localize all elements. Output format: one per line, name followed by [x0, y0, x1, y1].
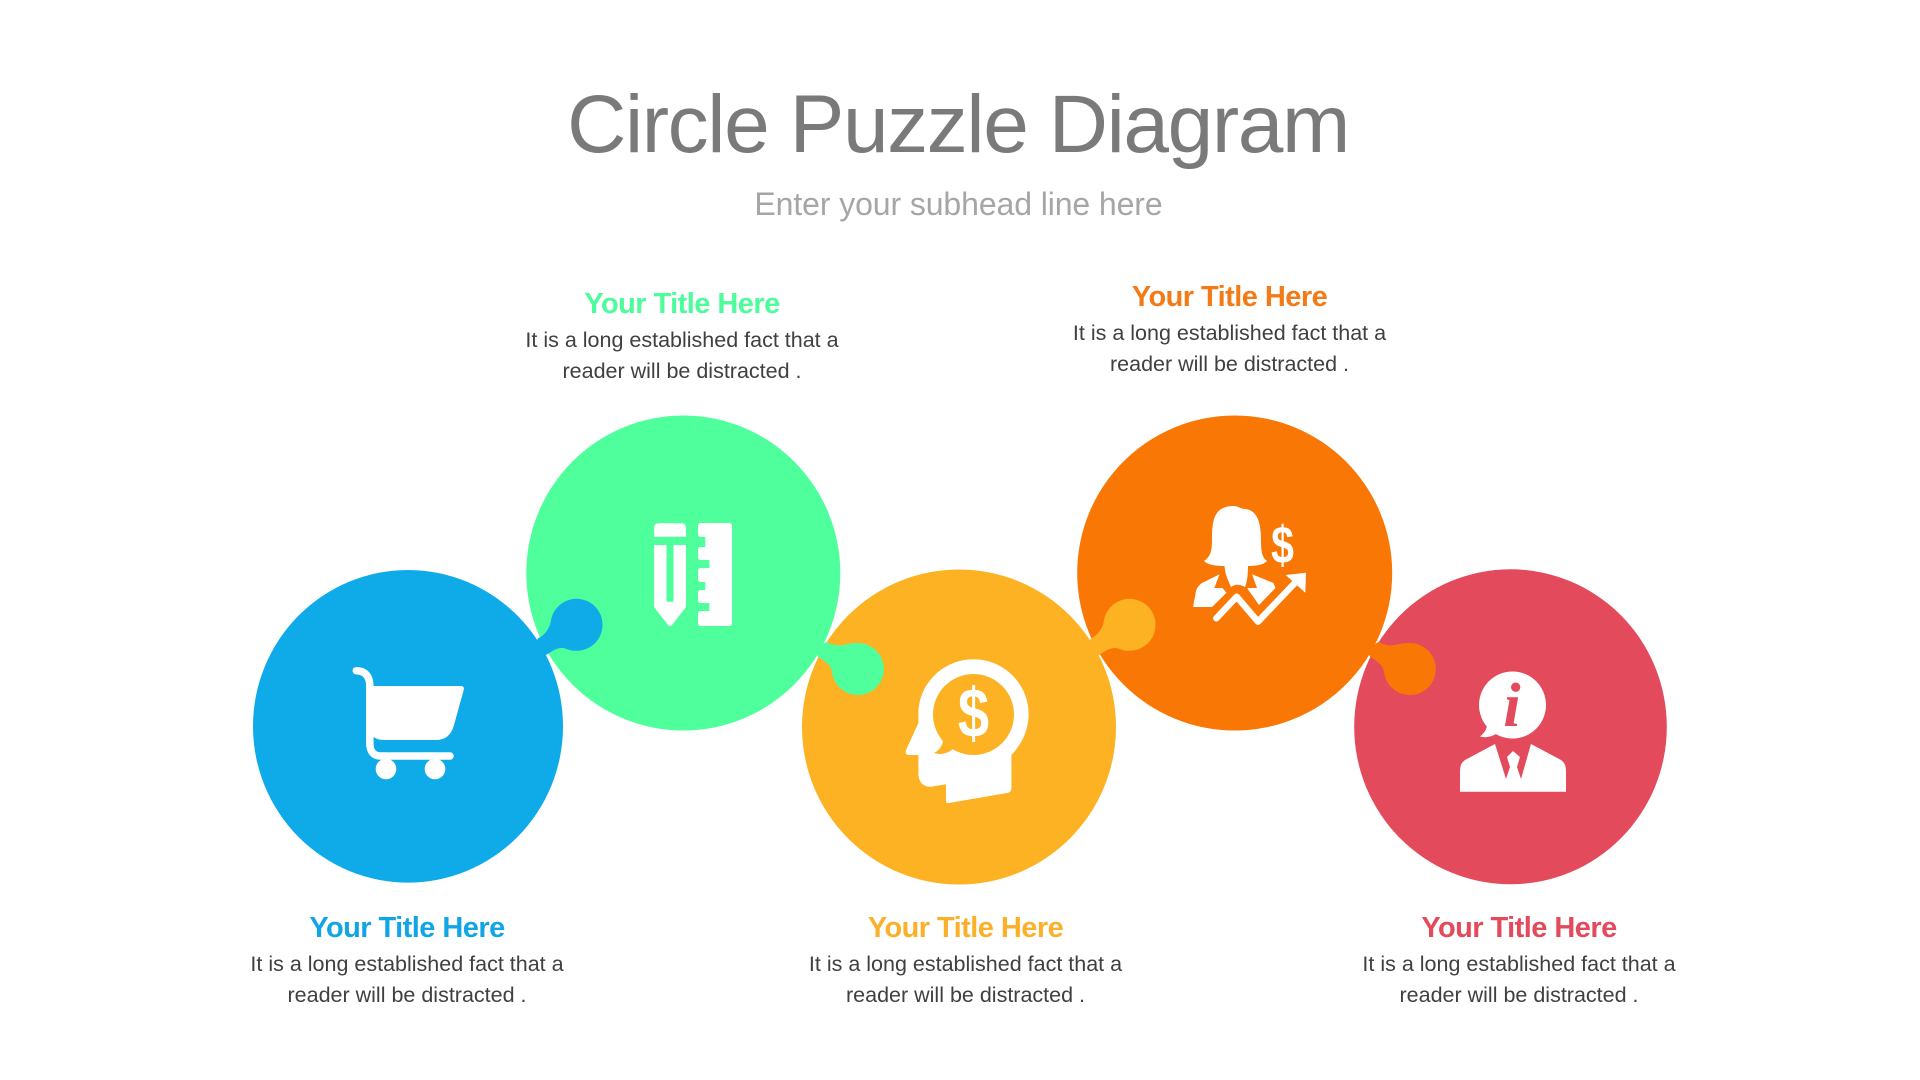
step 5: red circle with person info icon — [1354, 569, 1667, 884]
red circle — [1354, 569, 1667, 884]
caption: red step: It is a long established fact that a — [1362, 952, 1676, 976]
caption: orange step — [1073, 281, 1386, 376]
yellow circle — [802, 570, 1116, 884]
caption: blue step: Your Title Here — [309, 912, 505, 944]
title: Circle Puzzle Diagram — [567, 79, 1349, 170]
puzzle knob: blue into green — [532, 599, 603, 655]
caption: red step: reader will be distracted . — [1400, 983, 1638, 1007]
icon: shopping cart — [356, 671, 464, 779]
puzzle knob: yellow into orange — [1085, 599, 1156, 655]
step 4: orange circle with businesswoman icon — [1077, 416, 1436, 730]
caption: green step: reader will be distracted . — [562, 359, 802, 383]
caption: green step — [525, 288, 839, 383]
caption: yellow step: reader will be distracted . — [846, 983, 1085, 1007]
blue circle — [253, 570, 563, 883]
icon: businesswoman with rising chart: $ — [1271, 515, 1294, 574]
icon: pencil and ruler — [654, 523, 732, 626]
step 3: yellow circle with head and dollar icon — [802, 570, 1156, 884]
caption: red step — [1362, 912, 1676, 1007]
icon: businesswoman with rising chart — [1193, 506, 1306, 622]
caption: green step: It is a long established fact that a — [525, 328, 839, 352]
puzzle knob: orange into red — [1367, 642, 1436, 695]
caption: orange step: It is a long established fact that a — [1073, 321, 1386, 345]
caption: blue step: reader will be distracted . — [288, 983, 526, 1007]
icon: person with info bubble: i — [1503, 672, 1521, 740]
icon: person with info bubble — [1460, 672, 1566, 792]
green circle — [526, 416, 840, 730]
subtitle: Enter your subhead line here — [754, 186, 1163, 222]
icon: head with dollar bubble: $ — [958, 675, 989, 752]
step 1: blue circle with shopping cart icon — [253, 570, 603, 883]
caption: yellow step: It is a long established fact that a — [809, 952, 1122, 976]
caption: blue step: It is a long established fact that a — [250, 952, 564, 976]
caption: green step: Your Title Here — [584, 288, 780, 320]
caption: yellow step: Your Title Here — [868, 912, 1064, 944]
caption: blue step — [250, 912, 564, 1007]
orange circle — [1077, 416, 1392, 730]
puzzle knob: green into yellow — [815, 642, 884, 695]
caption: red step: Your Title Here — [1421, 912, 1617, 944]
step 2: green circle with pencil and ruler icon — [526, 416, 884, 730]
caption: orange step: reader will be distracted . — [1110, 352, 1349, 376]
icon: head with dollar bubble — [906, 659, 1029, 803]
caption: orange step: Your Title Here — [1132, 281, 1328, 313]
caption: yellow step — [809, 912, 1122, 1007]
